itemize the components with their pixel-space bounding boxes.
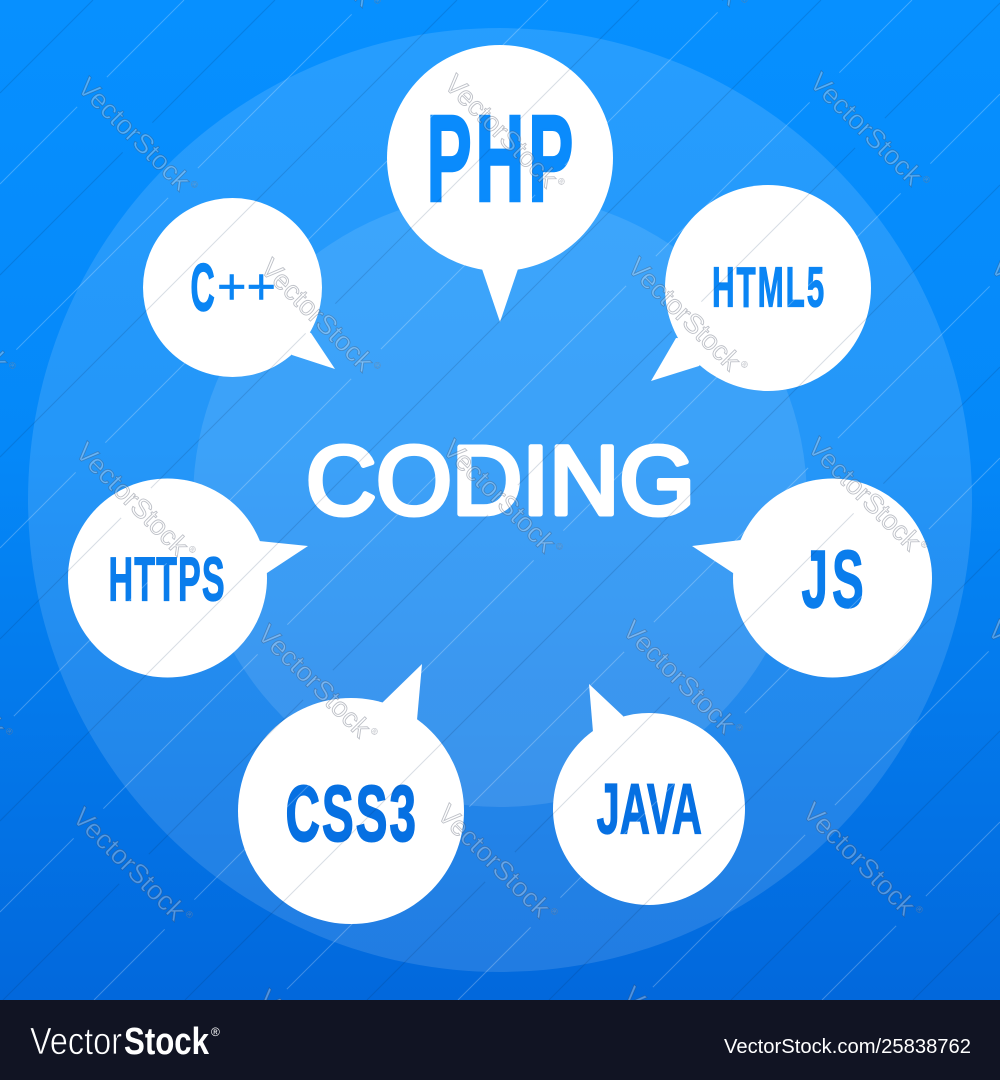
watermark: VectorStock repeated: VectorStock xyxy=(70,437,195,562)
watermark: VectorStock repeated: VectorStock xyxy=(622,252,747,377)
bubble: PHP: PHP xyxy=(426,91,577,228)
watermark: VectorStock repeated: ® xyxy=(553,541,565,553)
bubble: JS xyxy=(692,478,932,678)
watermark: VectorStock repeated: VectorStock xyxy=(255,253,380,378)
footer url: VectorStock.com/25838762 xyxy=(724,1036,971,1058)
watermark: VectorStock repeated: ® xyxy=(920,174,932,186)
watermark: VectorStock repeated: VectorStock xyxy=(252,619,377,744)
watermark: VectorStock repeated: VectorStock xyxy=(437,434,562,559)
watermark: VectorStock repeated: VectorStock xyxy=(797,797,922,922)
watermark: VectorStock repeated: VectorStock xyxy=(72,72,197,197)
footer logo: VectorStock: Vector xyxy=(30,1021,122,1063)
bubble: JAVA xyxy=(553,684,745,905)
bubble: HTML5: HTML5 xyxy=(712,254,826,319)
watermark: VectorStock repeated: VectorStock xyxy=(67,802,192,927)
watermark: VectorStock repeated: ® xyxy=(186,544,198,556)
footer logo: VectorStock: ® xyxy=(211,1025,220,1039)
bubble: C++ xyxy=(143,198,335,377)
watermark: VectorStock repeated: ® xyxy=(733,722,745,734)
footer logo: VectorStock xyxy=(30,1021,220,1063)
footer logo: VectorStock: Stock xyxy=(124,1021,210,1063)
title: CODING: CODING xyxy=(306,426,695,535)
watermark: VectorStock repeated: ® xyxy=(918,539,930,551)
bubble: C++: ++ xyxy=(217,258,276,315)
watermark: VectorStock repeated: VectorStock xyxy=(439,69,564,194)
bubble: JS: JS xyxy=(802,534,868,625)
watermark: VectorStock repeated: ® xyxy=(913,904,925,916)
bubble: C++: C xyxy=(190,251,215,326)
bubble: PHP xyxy=(387,45,613,322)
bubble: HTML5 xyxy=(651,185,871,391)
watermark: VectorStock repeated: VectorStock xyxy=(802,432,927,557)
bubble: HTTPS: HTTPS xyxy=(108,545,226,614)
inner circle xyxy=(193,193,807,807)
watermark: VectorStock repeated: ® xyxy=(188,179,200,191)
bubble: JAVA: JAVA xyxy=(596,770,702,849)
bubble: CSS3 xyxy=(238,664,464,924)
watermark: VectorStock repeated: ® xyxy=(738,359,750,371)
watermark: VectorStock repeated: VectorStock xyxy=(432,799,557,924)
watermark: VectorStock repeated: ® xyxy=(555,176,567,188)
bubble: CSS3: CSS3 xyxy=(286,769,418,857)
watermark: VectorStock repeated: ® xyxy=(3,726,15,738)
watermark: VectorStock repeated: VectorStock xyxy=(617,615,742,740)
bubble: HTTPS xyxy=(68,478,308,678)
watermark: VectorStock repeated: ® xyxy=(548,906,560,918)
watermark: VectorStock repeated: ® xyxy=(368,726,380,738)
watermark: VectorStock repeated: ® xyxy=(371,360,383,372)
footer bar xyxy=(0,1000,1000,1080)
watermark: VectorStock repeated: ® xyxy=(6,360,18,372)
watermark: VectorStock repeated: VectorStock xyxy=(804,67,929,192)
watermark: VectorStock repeated: ® xyxy=(183,909,195,921)
